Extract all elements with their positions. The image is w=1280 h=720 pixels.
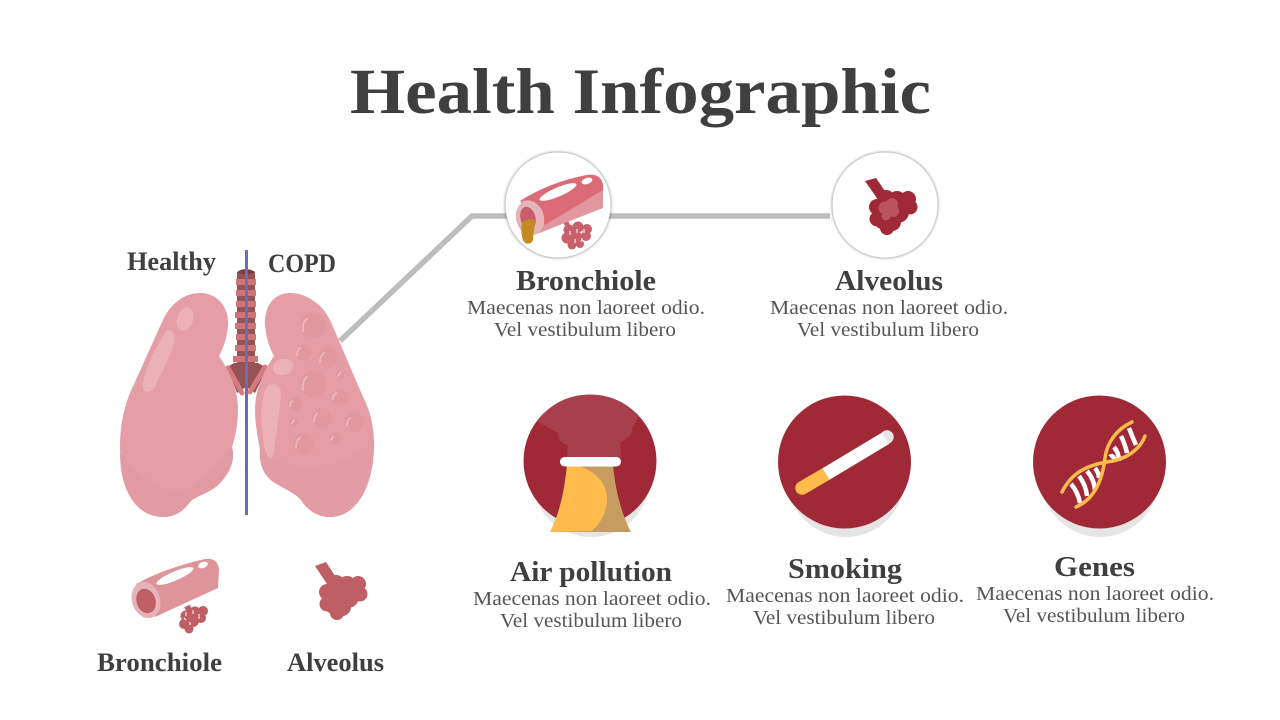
text: Genes description: Vel vestibulum libero xyxy=(1003,606,1185,627)
right COPD lung xyxy=(255,293,374,517)
text: Alveolus description xyxy=(770,298,1008,341)
text: Air pollution description: Maecenas non laoreet odio. xyxy=(473,589,711,610)
heading: Smoking: Smoking xyxy=(788,554,902,585)
text: Genes description xyxy=(976,584,1214,627)
emphysema bubbles xyxy=(288,312,364,455)
left healthy lung xyxy=(120,293,238,517)
heading: Genes: Genes xyxy=(1054,552,1135,583)
text: Smoking description: Maecenas non laoreet odio. xyxy=(726,586,964,607)
text: Bronchiole description: Maecenas non laoreet odio. xyxy=(467,298,705,319)
text: Air pollution description xyxy=(473,589,711,632)
connector line xyxy=(340,216,830,341)
icon circle: bronchiole xyxy=(506,152,610,258)
divider line xyxy=(245,250,248,515)
label: Alveolus lower: Alveolus xyxy=(287,648,384,677)
lungs diagram xyxy=(120,250,374,517)
text: Air pollution description: Vel vestibulum libero xyxy=(500,611,682,632)
icon: bronchiole small xyxy=(127,559,219,634)
text: Smoking description: Vel vestibulum libero xyxy=(753,608,935,629)
heading: Alveolus: Alveolus xyxy=(835,266,943,297)
title: Health Infographic xyxy=(350,56,931,128)
trachea xyxy=(227,269,267,393)
icon: smoking xyxy=(778,396,911,537)
label: COPD: COPD xyxy=(268,249,336,278)
text: Alveolus description: Maecenas non laoreet odio. xyxy=(770,298,1008,319)
icon: alveolus small xyxy=(315,562,368,620)
text: Genes description: Maecenas non laoreet odio. xyxy=(976,584,1214,605)
icon circle: alveolus xyxy=(832,152,938,258)
label: Bronchiole lower: Bronchiole xyxy=(97,648,222,677)
text: Smoking description xyxy=(726,586,964,629)
icon: air pollution xyxy=(520,394,660,537)
text: Bronchiole description xyxy=(467,298,705,341)
label: Healthy: Healthy xyxy=(127,247,216,276)
text: Alveolus description: Vel vestibulum libero xyxy=(797,320,979,341)
heading: Air pollution: Air pollution xyxy=(510,557,672,588)
icon: genes DNA xyxy=(1033,396,1166,537)
heading: Bronchiole: Bronchiole xyxy=(516,266,656,297)
text: Bronchiole description: Vel vestibulum libero xyxy=(494,320,676,341)
